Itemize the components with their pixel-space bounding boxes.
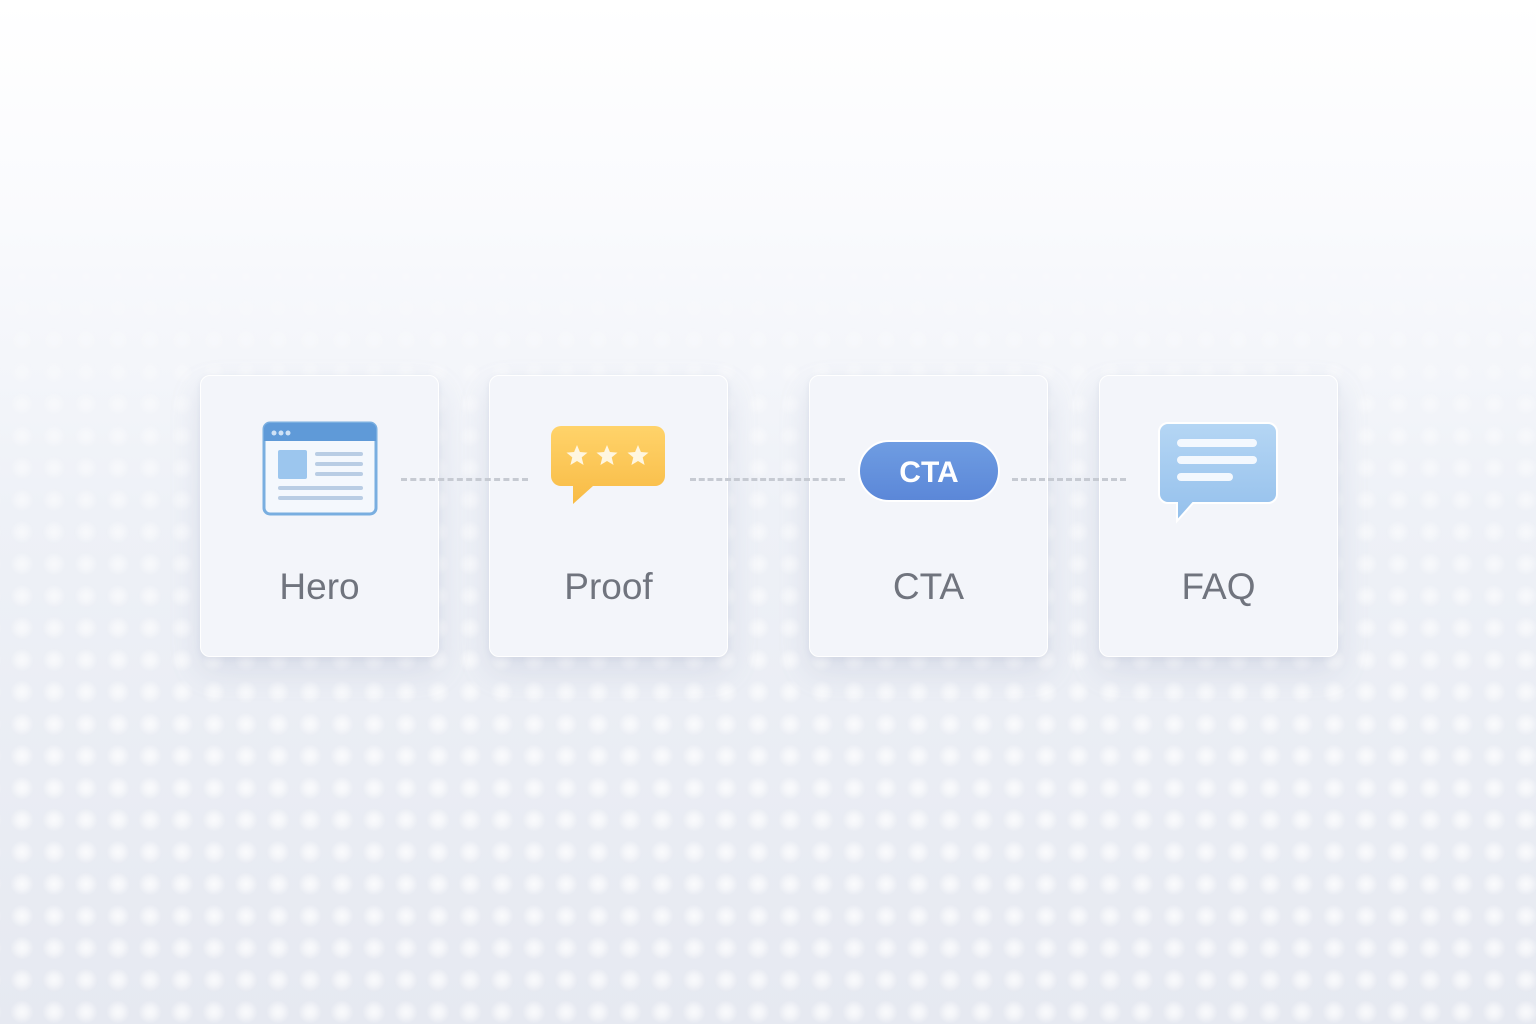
card: CTA [809,375,1048,657]
label: Proof: Proof [564,566,653,607]
icon: FAQ speech bubble [1158,422,1278,523]
connector: proof to cta [690,478,845,481]
connector: hero to proof [401,478,528,481]
icon: CTA button pill [858,440,1000,502]
label: FAQ: FAQ [1181,566,1256,607]
icon: review bubble with stars [551,426,665,504]
connector: cta to faq [1012,478,1126,481]
icon: CTA button pill: CTA [899,456,959,489]
card: FAQ [1099,375,1338,657]
card: Hero [200,375,439,657]
icon: browser window [262,422,378,516]
label: Hero: Hero [279,566,360,607]
label: CTA: CTA [893,566,964,607]
card: Proof [489,375,728,657]
